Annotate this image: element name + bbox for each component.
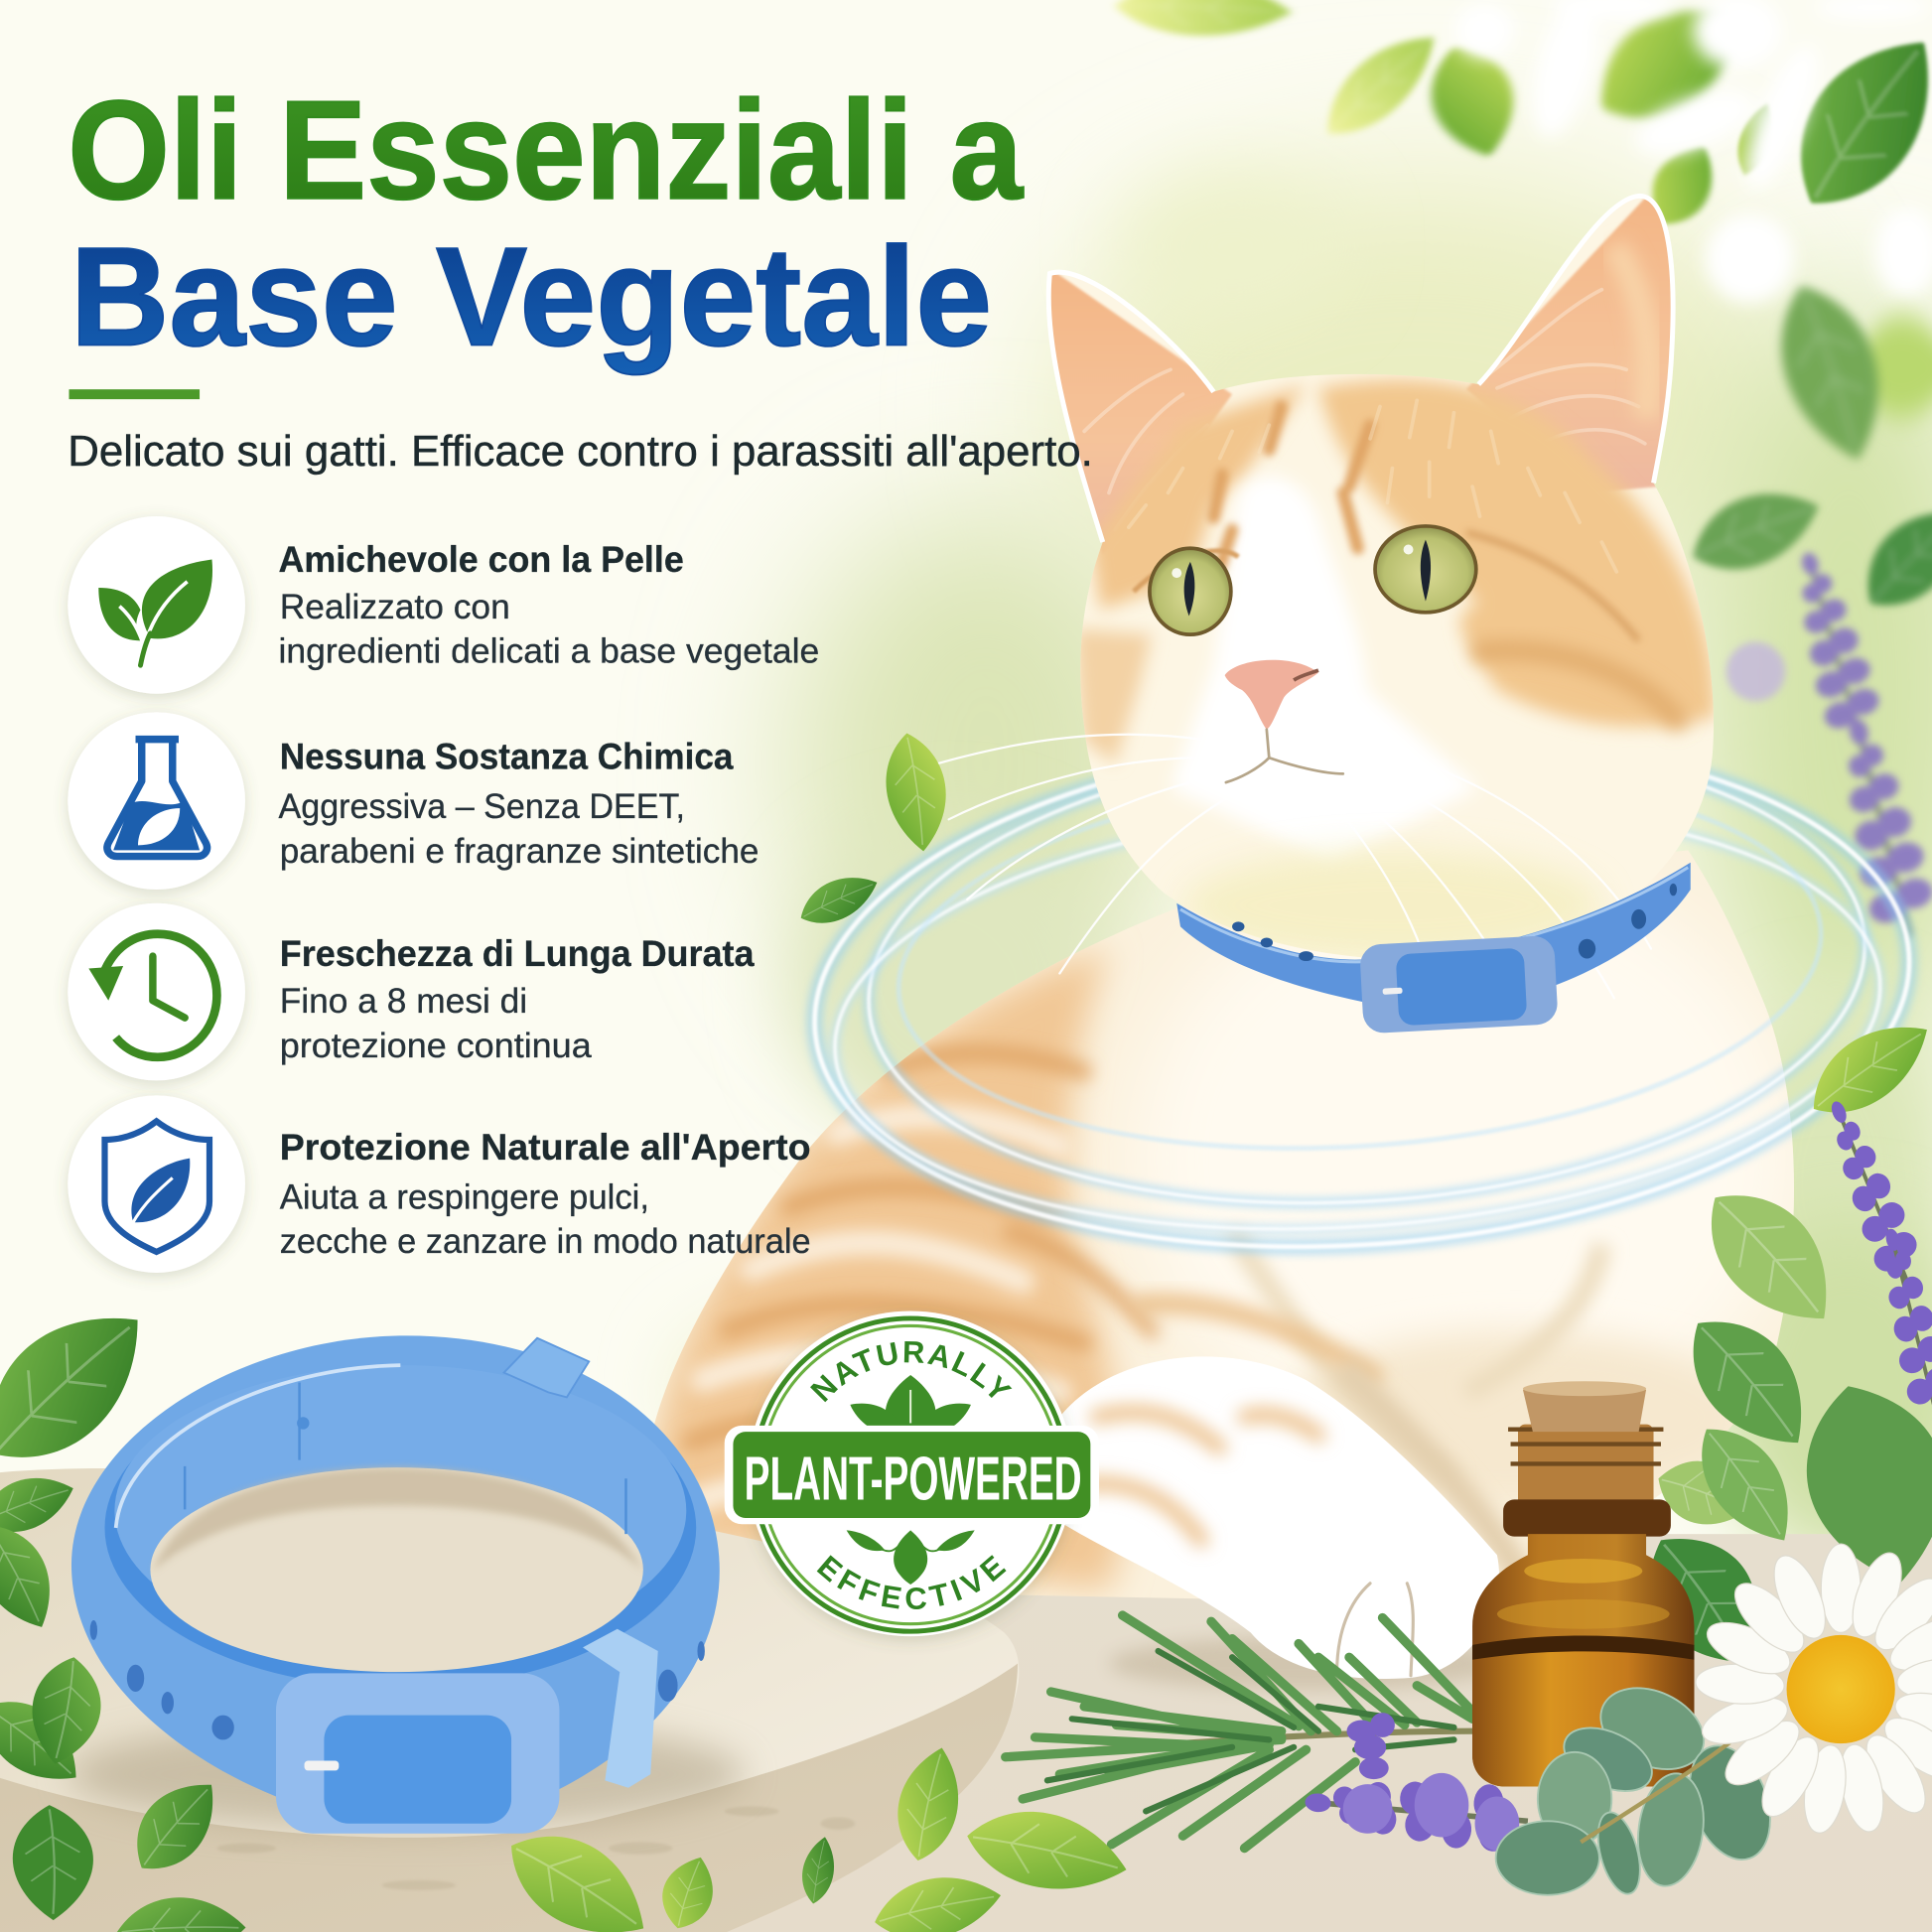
bottle collar xyxy=(1503,1499,1671,1537)
collar outer band xyxy=(71,1335,720,1796)
lavender: blurred background sprigs xyxy=(1726,545,1932,944)
icon: clock with arrow xyxy=(68,903,245,1080)
foliage: top canopy leaves xyxy=(1114,0,1932,303)
feature text: zecche e zanzare in modo naturale xyxy=(280,1223,811,1261)
white blossom blobs xyxy=(1455,0,1932,303)
foliage: right side leaves xyxy=(1680,271,1932,626)
eucalyptus branch xyxy=(1496,1672,1785,1898)
product collar buckle xyxy=(276,1673,559,1834)
protective energy rings around cat xyxy=(797,702,1926,1282)
eye right xyxy=(1375,526,1476,613)
cat head xyxy=(936,185,1716,1023)
foreground greenery left xyxy=(0,1280,247,1932)
bottle body xyxy=(1472,1534,1694,1787)
title: Base Vegetale xyxy=(70,218,992,374)
blue collar product xyxy=(68,1335,746,1834)
title xyxy=(68,71,1024,375)
badge bottom text: EFFECTIVE xyxy=(816,1555,1007,1609)
feature text: ingredienti delicati a base vegetale xyxy=(278,633,819,671)
forehead and cheek orange fur right xyxy=(1318,379,1716,727)
badge banner text: PLANT-POWERED xyxy=(745,1445,1082,1513)
badge top leaves xyxy=(850,1375,971,1427)
plant-powered badge xyxy=(725,1310,1099,1645)
feature text: parabeni e fragranze sintetiche xyxy=(280,833,759,871)
right ear inner xyxy=(1466,185,1674,492)
stone slab pedestal xyxy=(0,1468,1019,1932)
feature text: Aiuta a respingere pulci, xyxy=(280,1178,649,1216)
essential oil bottle xyxy=(1472,1381,1694,1787)
floating leaves near cat xyxy=(792,729,1932,1134)
feature text: Realizzato con xyxy=(280,589,510,626)
cork xyxy=(1523,1382,1646,1432)
feature text xyxy=(280,1126,811,1261)
daisy flower xyxy=(1695,1544,1932,1836)
feature text: Protezione Naturale all'Aperto xyxy=(280,1126,811,1168)
feature text xyxy=(280,932,755,1065)
badge bottom leaves xyxy=(847,1530,975,1585)
feature text: Aggressiva – Senza DEET, xyxy=(278,788,685,826)
icon: leaf sprout xyxy=(68,516,245,694)
product collar keeper top xyxy=(504,1338,589,1397)
feature text: protezione continua xyxy=(280,1028,592,1065)
icon: shield with leaf xyxy=(68,1095,245,1273)
left cheek patch xyxy=(1074,628,1152,763)
eye left xyxy=(1150,548,1231,634)
subtitle: Delicato sui gatti. Efficace contro i parassiti all'aperto. xyxy=(68,428,1093,476)
lavender bunch in front of bottle xyxy=(1303,1713,1531,1855)
left ear inner xyxy=(1044,265,1232,554)
shadow under collar xyxy=(68,1719,746,1830)
badge top text: NATURALLY xyxy=(810,1341,1013,1402)
white blaze xyxy=(1171,476,1478,863)
rosemary sprigs xyxy=(1006,1615,1472,1849)
feature text: Freschezza di Lunga Durata xyxy=(280,932,755,974)
bottle neck xyxy=(1518,1425,1654,1511)
feature text: Nessuna Sostanza Chimica xyxy=(280,735,734,776)
cat body xyxy=(651,850,1799,1601)
collar buckle xyxy=(1359,935,1559,1034)
ear fur wisps xyxy=(1082,288,1647,494)
feature text: Amichevole con la Pelle xyxy=(278,538,684,580)
foreground greenery right xyxy=(1622,1093,1932,1690)
feature: no harsh chemicals xyxy=(68,712,759,890)
fur strokes on head xyxy=(1129,400,1616,572)
feature text xyxy=(278,538,819,671)
ear rim highlight xyxy=(1048,196,1673,542)
cat foreleg and paw xyxy=(1059,1356,1503,1691)
feature text: Fino a 8 mesi di xyxy=(280,983,527,1021)
badge banner xyxy=(725,1426,1099,1524)
feature: natural outdoor protection xyxy=(68,1095,811,1273)
product collar keeper side xyxy=(583,1629,658,1788)
foreground greenery bottom xyxy=(491,1741,1135,1932)
feature: long lasting freshness xyxy=(68,903,755,1080)
collar inner wall xyxy=(114,1365,686,1656)
feature: skin friendly xyxy=(68,516,819,694)
collar dark inner stripe xyxy=(104,1368,696,1688)
collar hole showing stone xyxy=(150,1467,643,1672)
blue collar worn by cat xyxy=(1176,863,1691,1034)
title accent rule xyxy=(69,389,200,399)
whiskers xyxy=(936,735,1651,1023)
forehead orange fur left xyxy=(1090,384,1307,610)
nose and mouth xyxy=(1225,660,1343,782)
feature text xyxy=(278,735,759,871)
stone floor xyxy=(492,1534,1932,1932)
icon: flask with leaf xyxy=(68,712,245,890)
title: Oli Essenziali a xyxy=(68,71,1024,228)
